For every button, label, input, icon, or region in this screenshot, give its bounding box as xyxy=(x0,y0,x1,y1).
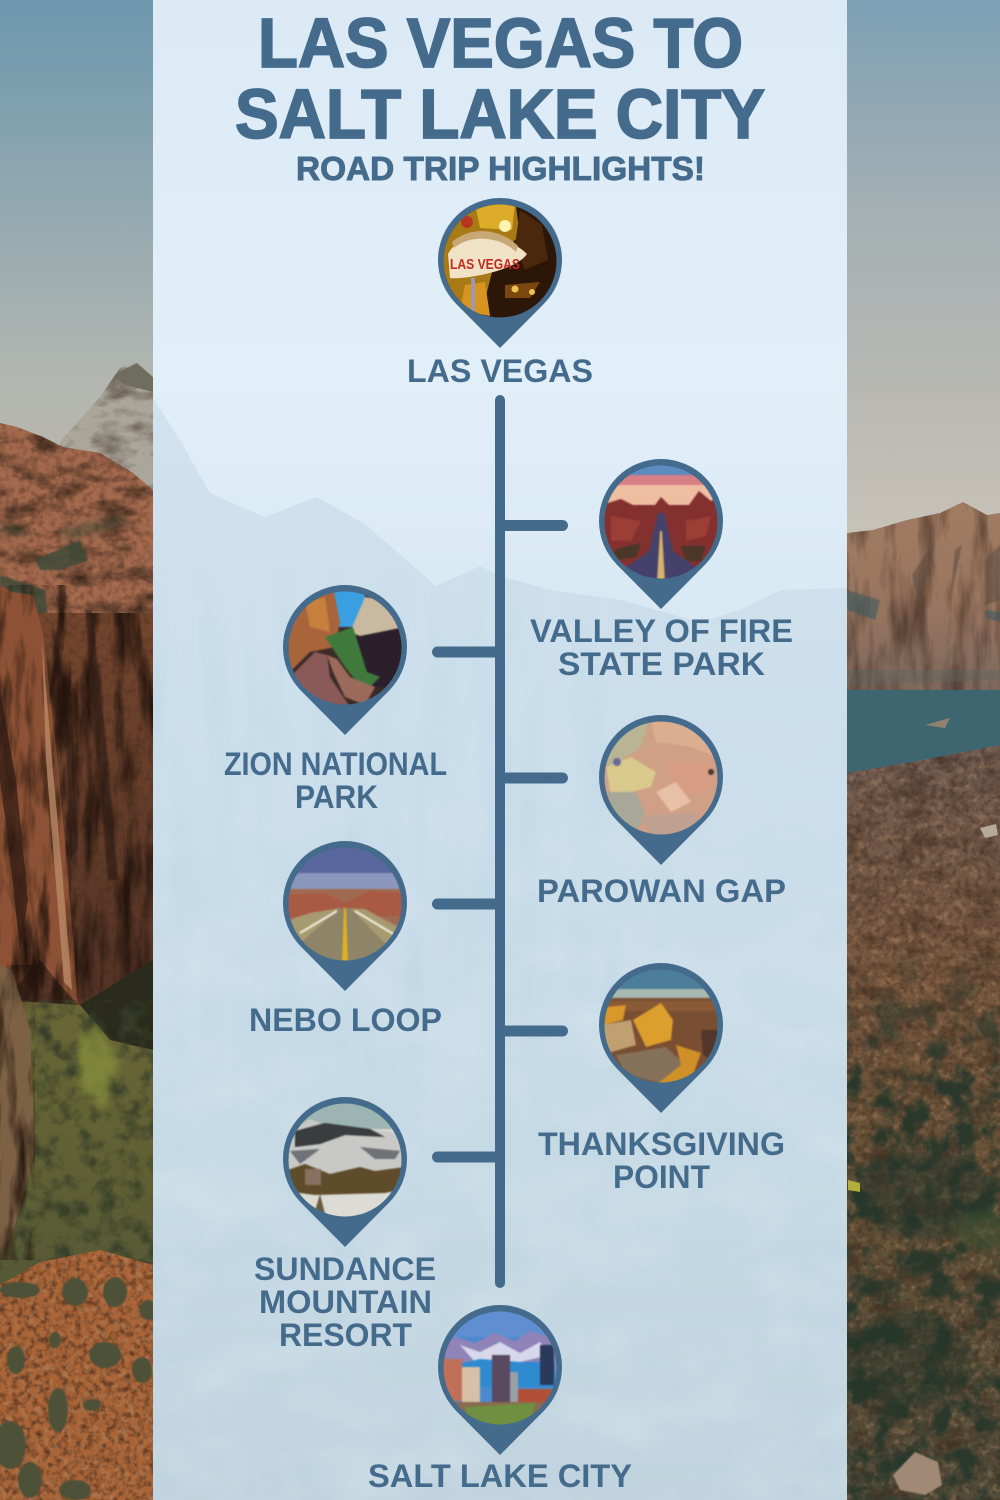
label: Thanksgiving Point: THANKSGIVING xyxy=(538,1126,785,1162)
pin: Valley of Fire xyxy=(599,459,723,609)
teal valley shadow band xyxy=(847,690,1000,775)
pin: Thanksgiving Point xyxy=(599,963,723,1113)
faded mountain silhouette xyxy=(153,390,847,1500)
green slope xyxy=(0,1000,153,1285)
translucent centre panel xyxy=(153,0,847,1500)
pin: Salt Lake City xyxy=(438,1305,562,1455)
pin: Nebo Loop xyxy=(283,841,407,991)
label: Sundance Mountain Resort: RESORT xyxy=(279,1317,412,1353)
title: SALT LAKE CITY xyxy=(235,75,765,153)
label: Valley of Fire State Park: STATE PARK xyxy=(558,646,765,682)
pin: Sundance Mountain Resort xyxy=(283,1097,407,1247)
background photo: right canyon wall xyxy=(840,0,1000,1500)
timeline with branches xyxy=(432,395,568,1288)
label: Zion National Park: ZION NATIONAL xyxy=(224,746,447,782)
pin: Las Vegas xyxy=(438,198,562,348)
dark trees xyxy=(80,960,153,1060)
pin: Zion National Park xyxy=(283,585,407,735)
label: Sundance Mountain Resort: SUNDANCE xyxy=(254,1251,436,1287)
pin: Las Vegas: LAS VEGAS xyxy=(450,256,520,273)
yellow foliage xyxy=(78,1025,120,1110)
foreground buttress xyxy=(0,585,78,1005)
cliff fissures xyxy=(65,610,118,880)
label: Nebo Loop: NEBO LOOP xyxy=(249,1002,442,1038)
red rock upper cliff xyxy=(0,423,153,620)
label: Sundance Mountain Resort: MOUNTAIN xyxy=(259,1284,432,1320)
subtitle: ROAD TRIP HIGHLIGHTS! xyxy=(296,150,705,187)
label: Las Vegas: LAS VEGAS xyxy=(407,353,593,389)
sandstone cliff xyxy=(847,500,1000,700)
label: Valley of Fire State Park: VALLEY OF FIRE xyxy=(530,613,793,649)
label: Valley of Fire State Park xyxy=(530,613,793,682)
label: Zion National Park: PARK xyxy=(295,779,378,815)
label: Salt Lake City: SALT LAKE CITY xyxy=(368,1458,632,1494)
label: Parowan Gap: PAROWAN GAP xyxy=(537,873,786,909)
pale rock peak xyxy=(60,360,153,490)
label: Zion National Park xyxy=(224,746,447,815)
boulder xyxy=(893,1452,942,1495)
title xyxy=(235,4,765,153)
dark green scrub xyxy=(847,940,1000,1500)
label: Thanksgiving Point xyxy=(538,1126,785,1195)
brown slope xyxy=(840,745,1000,1500)
pin: Parowan Gap xyxy=(599,715,723,865)
dark lower cliff xyxy=(20,613,153,1005)
label: Thanksgiving Point: POINT xyxy=(613,1159,710,1195)
orange slope xyxy=(0,1250,153,1500)
shrubs xyxy=(0,1277,156,1500)
label: Sundance Mountain Resort xyxy=(254,1251,436,1353)
Welcome sign xyxy=(448,237,527,278)
rock strip xyxy=(0,965,35,1260)
title: LAS VEGAS TO xyxy=(258,4,743,82)
background photo: left canyon wall xyxy=(0,0,156,1500)
